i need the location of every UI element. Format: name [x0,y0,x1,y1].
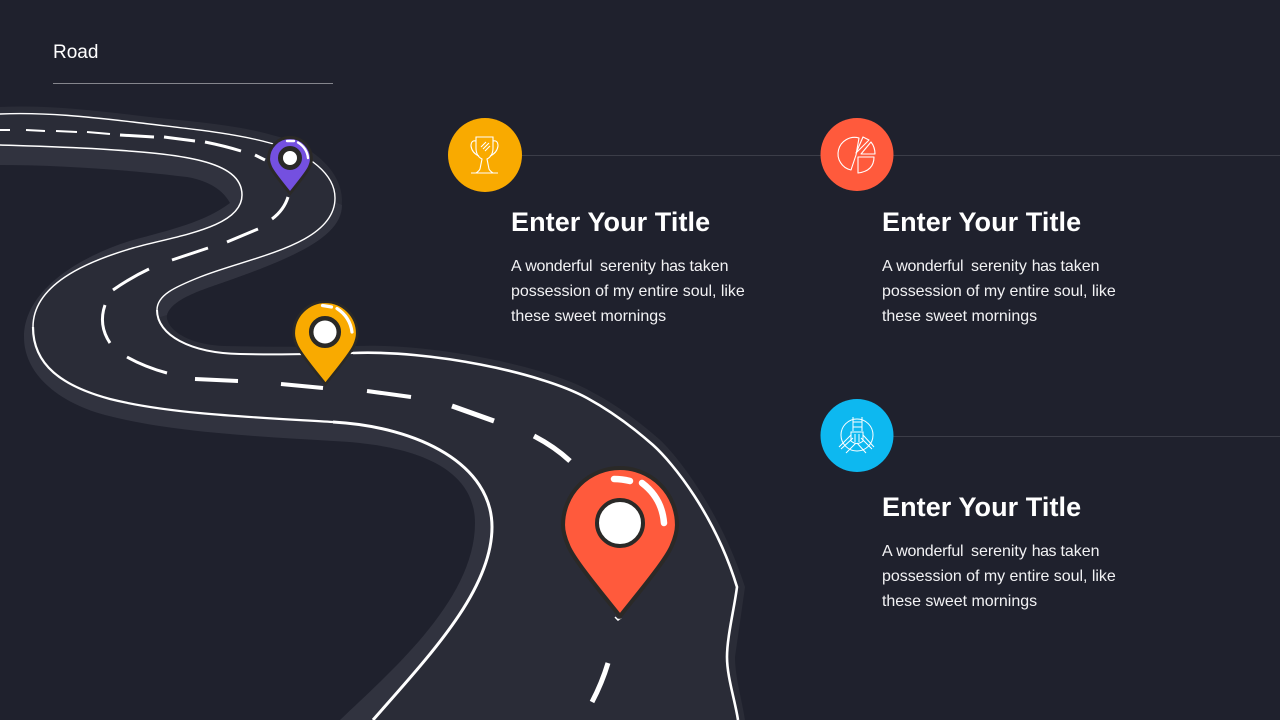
heading: Enter Your Title [882,492,1081,522]
pin: red [563,468,677,616]
pin: orange [294,302,357,384]
road edge lines [0,114,738,720]
road outer halo [0,107,745,720]
text block: A wonderful serenity has taken [882,543,1099,560]
panel: second item [820,118,1116,325]
panel: first item [448,118,745,325]
text block: these sweet mornings [882,593,1037,610]
text block: possession of my entire soul, like [511,283,745,300]
title: Road [53,42,98,63]
text block [511,258,745,325]
pin: purple [269,138,311,193]
text block: possession of my entire soul, like [882,568,1116,585]
road surface [0,114,738,720]
heading: Enter Your Title [882,207,1081,237]
text block: these sweet mornings [511,308,666,325]
text block [882,543,1116,610]
icon: pie chart [820,118,894,191]
text block: A wonderful serenity has taken [511,258,728,275]
text block [882,258,1116,325]
heading: Enter Your Title [511,207,710,237]
text block: these sweet mornings [882,308,1037,325]
icon: trophy [448,118,522,192]
panel: third item [820,399,1116,610]
icon: joined hands [820,399,894,472]
text block: possession of my entire soul, like [882,283,1116,300]
text block: A wonderful serenity has taken [882,258,1099,275]
road centre dashes [0,130,621,702]
road shoulder shadow [0,130,520,720]
